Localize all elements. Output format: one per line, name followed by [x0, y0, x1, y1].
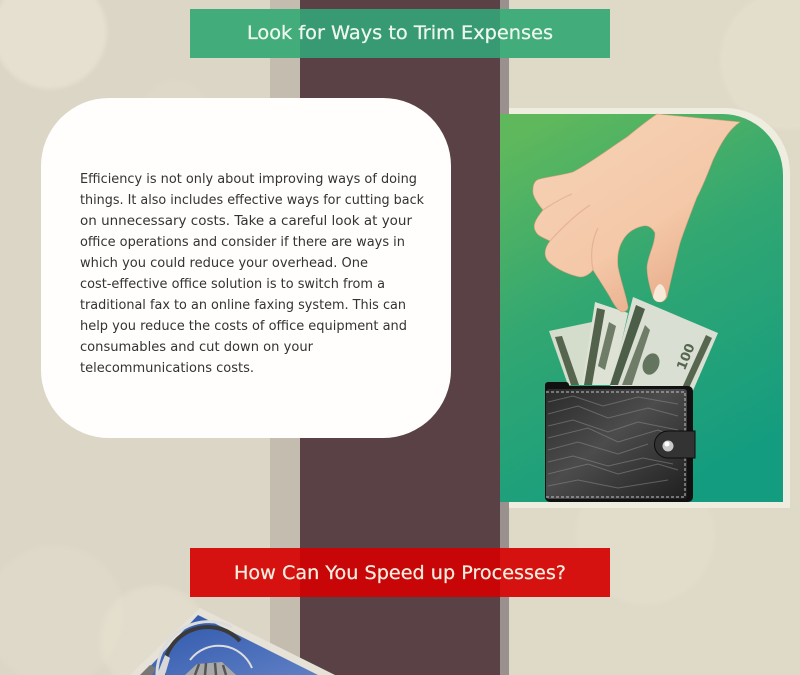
icon: hand [533, 114, 740, 312]
panel: hand and wallet illustration [500, 108, 790, 508]
body text: on unnecessary costs. Take a careful look at your [80, 214, 413, 229]
body text: things. It also includes effective ways for cutting back [80, 193, 424, 208]
icon: dollar bills [549, 297, 718, 393]
body text: cost-effective office solution is to switch from a [80, 277, 385, 292]
heading: Look for Ways to Trim Expenses [190, 9, 610, 58]
body text: telecommunications costs. [80, 361, 254, 376]
center vertical band [270, 0, 509, 675]
body text [80, 172, 424, 376]
image: bearing on blue tile [130, 608, 335, 675]
icon: wallet [545, 382, 695, 502]
body text: consumables and cut down on your [80, 340, 314, 355]
heading: How Can You Speed up Processes? [190, 548, 610, 597]
heading: How Can You Speed up Processes?: How Can You Speed up Processes? [234, 562, 566, 584]
panel: text card [41, 98, 451, 438]
body text: traditional fax to an online faxing system. This can [80, 298, 406, 313]
heading: Look for Ways to Trim Expenses: Look for Ways to Trim Expenses [247, 22, 553, 44]
body text: Efficiency is not only about improving ways of doing [80, 172, 417, 187]
body text: help you reduce the costs of office equipment and [80, 319, 407, 334]
body text: office operations and consider if there are ways in [80, 235, 405, 250]
body text: which you could reduce your overhead. One [80, 256, 368, 271]
icon: dollar bills: 100 [675, 342, 699, 372]
